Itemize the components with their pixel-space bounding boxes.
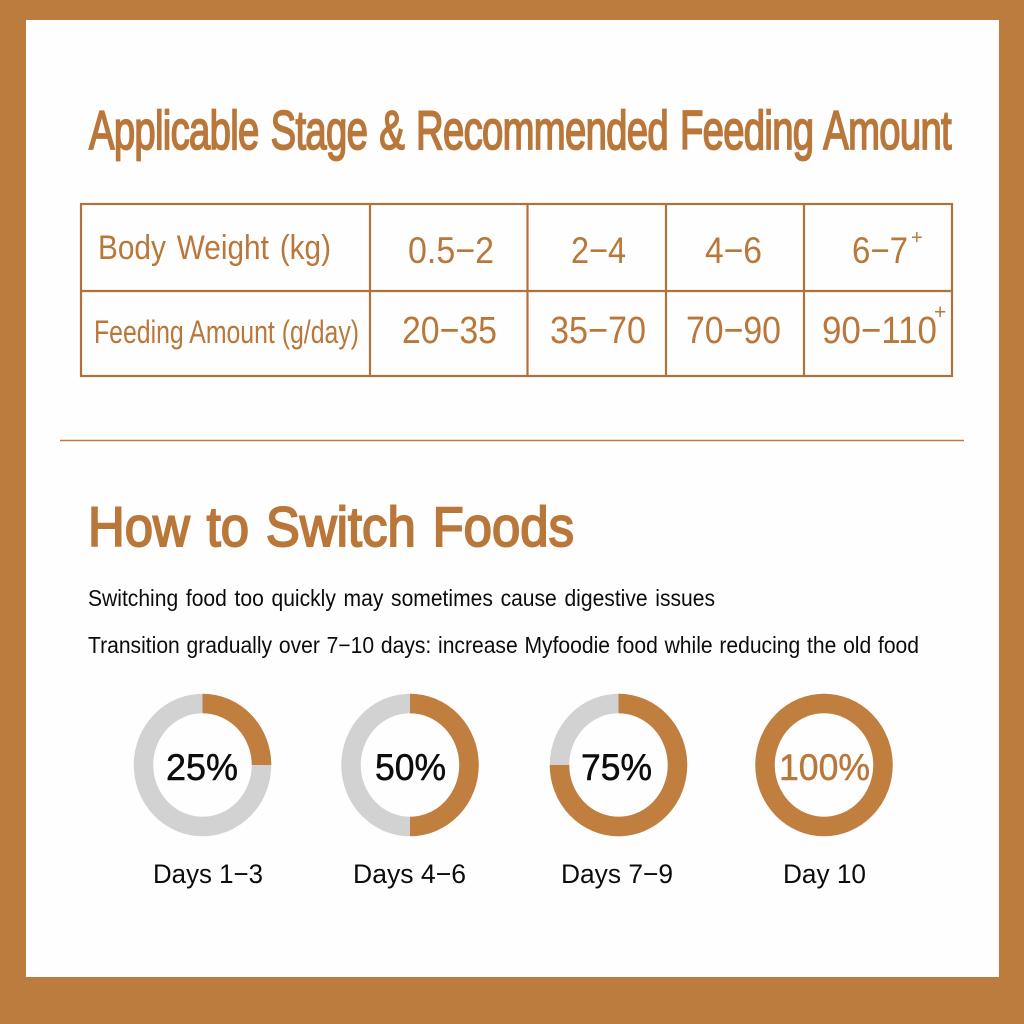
feeding value 90-110+: + (934, 301, 946, 324)
donut: 25 percent, days 1-3: Days 1−3 (153, 859, 263, 889)
feeding value 70-90: 70−90 (686, 310, 781, 352)
feeding value 20-35: 20−35 (402, 310, 497, 352)
intro text (88, 585, 919, 658)
donut: 75 percent, days 7-9 (560, 704, 678, 889)
donut: 50 percent, days 4-6 (351, 704, 469, 889)
heading: how to switch foods: How to Switch Foods (88, 495, 574, 558)
donut: 75 percent, days 7-9: 75% (581, 747, 652, 788)
table grid (81, 204, 952, 376)
donut: 75 percent, days 7-9: Days 7−9 (561, 859, 673, 889)
weight value 0.5-2: 0.5−2 (408, 230, 494, 271)
row header: body weight: Body Weight (kg) (98, 229, 331, 267)
feeding value 35-70: 35−70 (550, 310, 646, 352)
donut: 50 percent, days 4-6: Days 4−6 (353, 859, 466, 889)
section divider (60, 440, 964, 442)
intro text: Switching food too quickly may sometimes cause digestive issues (88, 585, 715, 611)
weight value 4-6: 4−6 (705, 230, 762, 271)
donut: 25 percent, days 1-3: 25% (166, 747, 238, 788)
donut: 100 percent, day 10: 100% (779, 747, 870, 788)
feeding value 90-110+: 90−110 (822, 310, 937, 352)
donut: 25 percent, days 1-3 (144, 704, 263, 889)
donut: 50 percent, days 4-6: 50% (375, 747, 446, 788)
row header: feeding amount: Feeding Amount (g/day) (94, 314, 359, 350)
weight value 6-7+: 6−7 (852, 230, 908, 271)
weight value 2-4: 2−4 (571, 230, 626, 271)
transition donut charts (144, 704, 883, 889)
feeding table (81, 204, 952, 376)
weight value 6-7+: + (911, 227, 923, 249)
donut: 100 percent, day 10: Day 10 (783, 859, 866, 889)
donut: 100 percent, day 10 (765, 704, 883, 889)
intro text: Transition gradually over 7−10 days: increase Myfoodie food while reducing the old food (88, 632, 919, 658)
